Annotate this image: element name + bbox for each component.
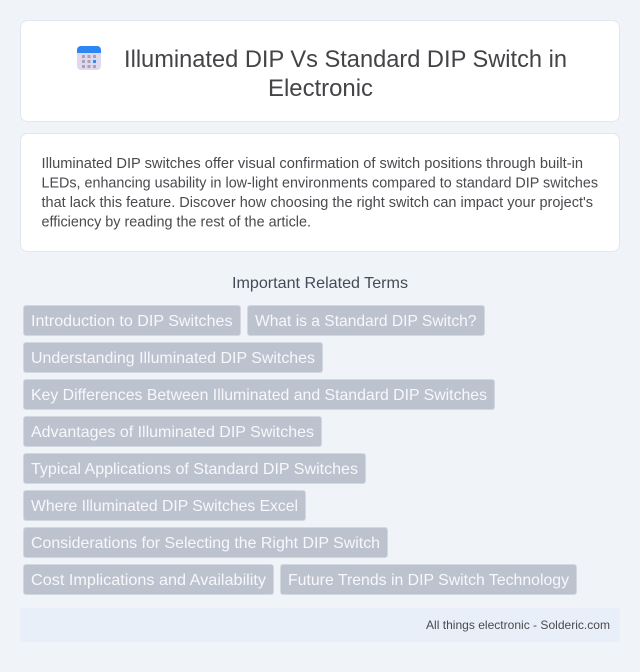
footer: All things electronic - Solderic.com (426, 618, 610, 632)
tag: key differences: Key Differences Between Illuminated and Standard DIP Switches (31, 387, 487, 404)
text block: introduction: LEDs, enhancing usability in low-light environments compared to standard DIP switches (42, 176, 598, 192)
heading: important related terms: Important Related Terms (232, 275, 408, 292)
tag: understanding illuminated DIP switches: Understanding Illuminated DIP Switches (31, 350, 315, 367)
footer (20, 608, 620, 642)
tag: considerations (24, 528, 388, 558)
tag: cost implications: Cost Implications and Availability (31, 572, 266, 589)
tag: where illuminated DIP switches excel: Where Illuminated DIP Switches Excel (31, 498, 298, 515)
panel: title card (20, 20, 620, 122)
text block: introduction: that lack this feature. Discover how choosing the right switch can impact your project's (42, 195, 593, 211)
tag: advantages: Advantages of Illuminated DIP Switches (31, 424, 314, 441)
title: Electronic (268, 75, 373, 102)
tag: future trends: Future Trends in DIP Switch Technology (288, 572, 569, 589)
title: Illuminated DIP Vs Standard DIP Switch in (124, 46, 567, 73)
tag: key differences (24, 380, 494, 410)
text block: introduction (42, 156, 598, 230)
tag: future trends (280, 564, 576, 594)
tag: advantages (24, 416, 322, 446)
tag: what is a standard DIP switch (248, 306, 484, 336)
tag: what is a standard DIP switch: What is a Standard DIP Switch? (255, 313, 477, 330)
icon: calendar grid (77, 46, 101, 70)
tag: typical applications (24, 454, 366, 484)
tag: understanding illuminated DIP switches (24, 342, 322, 372)
tag: considerations: Considerations for Selecting the Right DIP Switch (31, 535, 380, 552)
text block: introduction: efficiency by reading the rest of the article. (42, 214, 311, 230)
tag: cost implications (24, 564, 274, 594)
panel: introduction text card (20, 134, 620, 252)
tag: introduction to DIP switches: Introduction to DIP Switches (31, 313, 232, 330)
title (124, 46, 567, 102)
text block: introduction: Illuminated DIP switches offer visual confirmation of switch positions through built-in (42, 156, 583, 172)
tag: introduction to DIP switches (24, 306, 240, 336)
tag: typical applications: Typical Applications of Standard DIP Switches (31, 461, 358, 478)
panel: related term tags (24, 306, 576, 594)
tag: where illuminated DIP switches excel (24, 490, 306, 520)
